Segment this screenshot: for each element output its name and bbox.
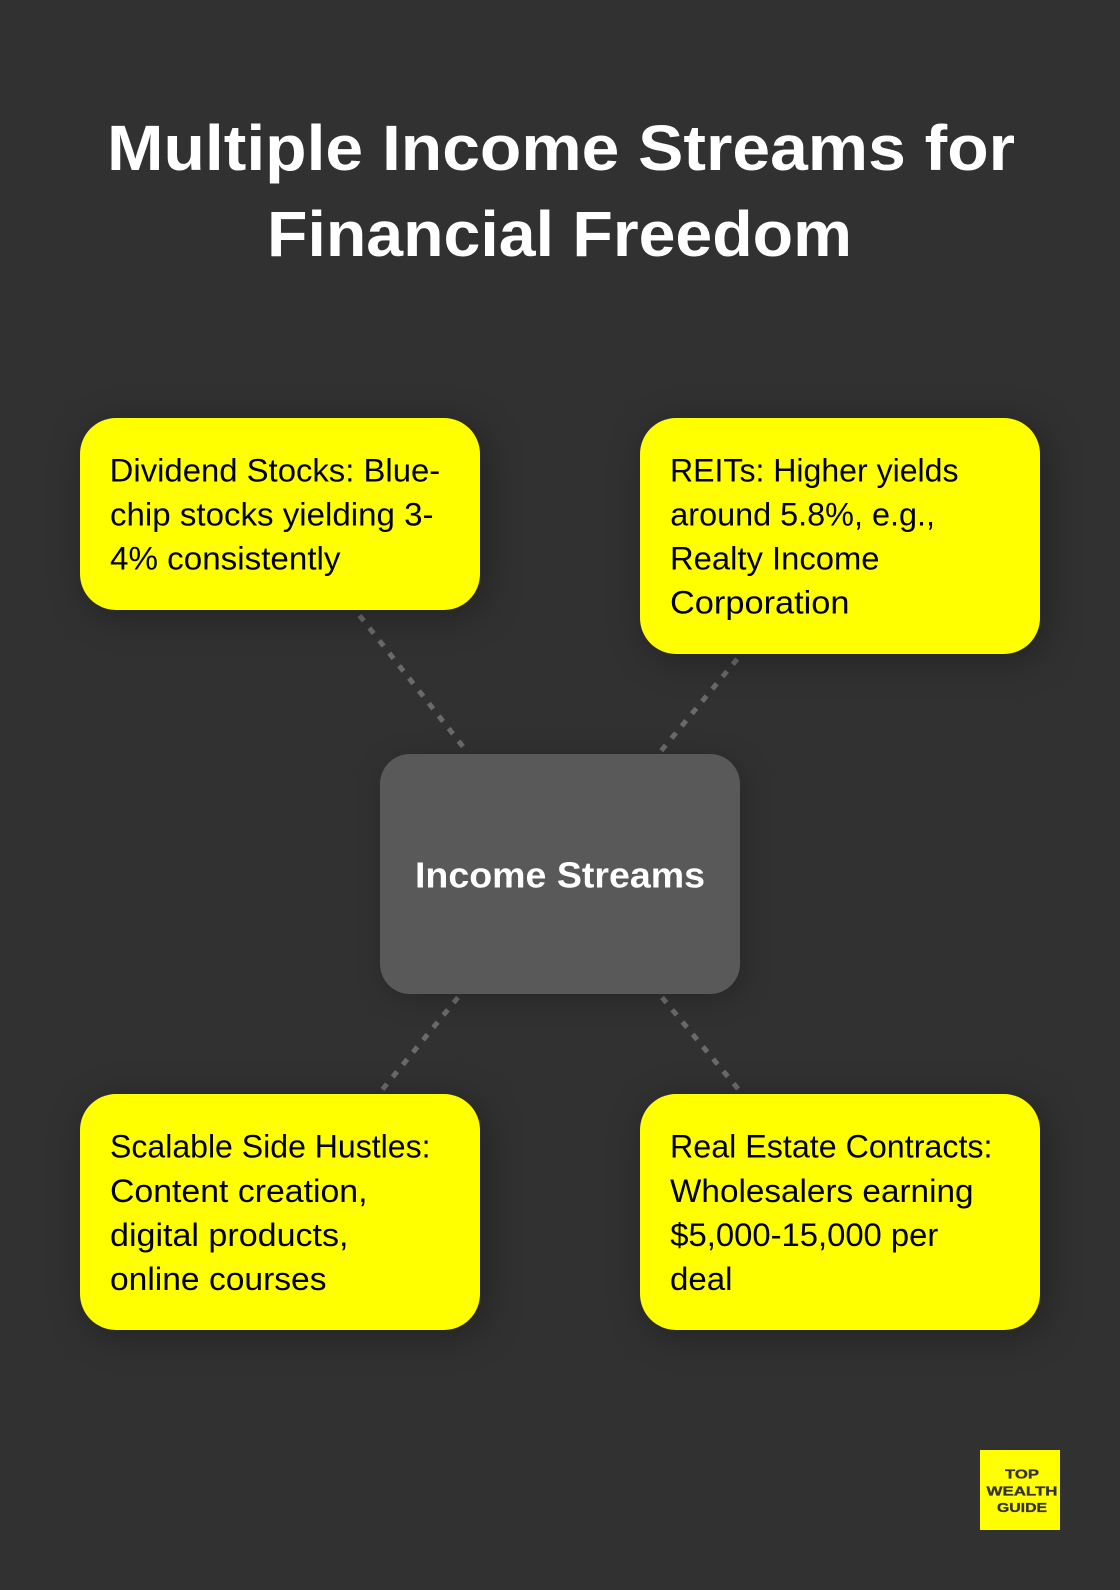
- logo: Top Wealth Guide: WEALTH: [986, 1484, 1058, 1498]
- panel: real estate contracts: Real Estate Contracts:: [670, 1129, 992, 1165]
- connector: REITs to center: [661, 659, 737, 751]
- panel: REITs: Realty Income: [670, 541, 880, 577]
- title: Multiple Income Streams for: [107, 112, 1015, 184]
- panel: scalable side hustles: Content creation,: [110, 1173, 368, 1209]
- title: [107, 112, 1015, 270]
- panel: center hub: [380, 754, 740, 994]
- connector: dividend stocks to center: [360, 615, 468, 753]
- panel: real estate contracts: $5,000-15,000 per: [670, 1217, 939, 1253]
- title: Financial Freedom: [267, 198, 852, 270]
- panel: dividend stocks: chip stocks yielding 3-: [110, 497, 433, 533]
- panel: scalable side hustles: Scalable Side Hustles:: [110, 1129, 430, 1165]
- logo: Top Wealth Guide: GUIDE: [997, 1501, 1047, 1515]
- panel: scalable side hustles: online courses: [110, 1261, 326, 1297]
- panel: dividend stocks: 4% consistently: [110, 541, 340, 577]
- panel: real estate contracts: [640, 1094, 1040, 1330]
- connector: real estate contracts to center: [662, 997, 739, 1090]
- panel: real estate contracts: deal: [670, 1261, 732, 1297]
- panel: dividend stocks: [80, 418, 480, 610]
- logo: Top Wealth Guide: [980, 1450, 1060, 1530]
- panel: dividend stocks: Dividend Stocks: Blue-: [110, 453, 440, 489]
- connector: side hustles to center: [382, 997, 458, 1090]
- panel: real estate contracts: Wholesalers earning: [670, 1173, 974, 1209]
- panel: scalable side hustles: digital products,: [110, 1217, 348, 1253]
- panel: REITs: REITs: Higher yields: [670, 453, 958, 489]
- panel: REITs: around 5.8%, e.g.,: [670, 497, 935, 533]
- center label: Income Streams: [415, 855, 705, 896]
- panel: scalable side hustles: [80, 1094, 480, 1330]
- logo: Top Wealth Guide: TOP: [1005, 1467, 1039, 1481]
- panel: REITs: [640, 418, 1040, 654]
- panel: REITs: Corporation: [670, 585, 850, 621]
